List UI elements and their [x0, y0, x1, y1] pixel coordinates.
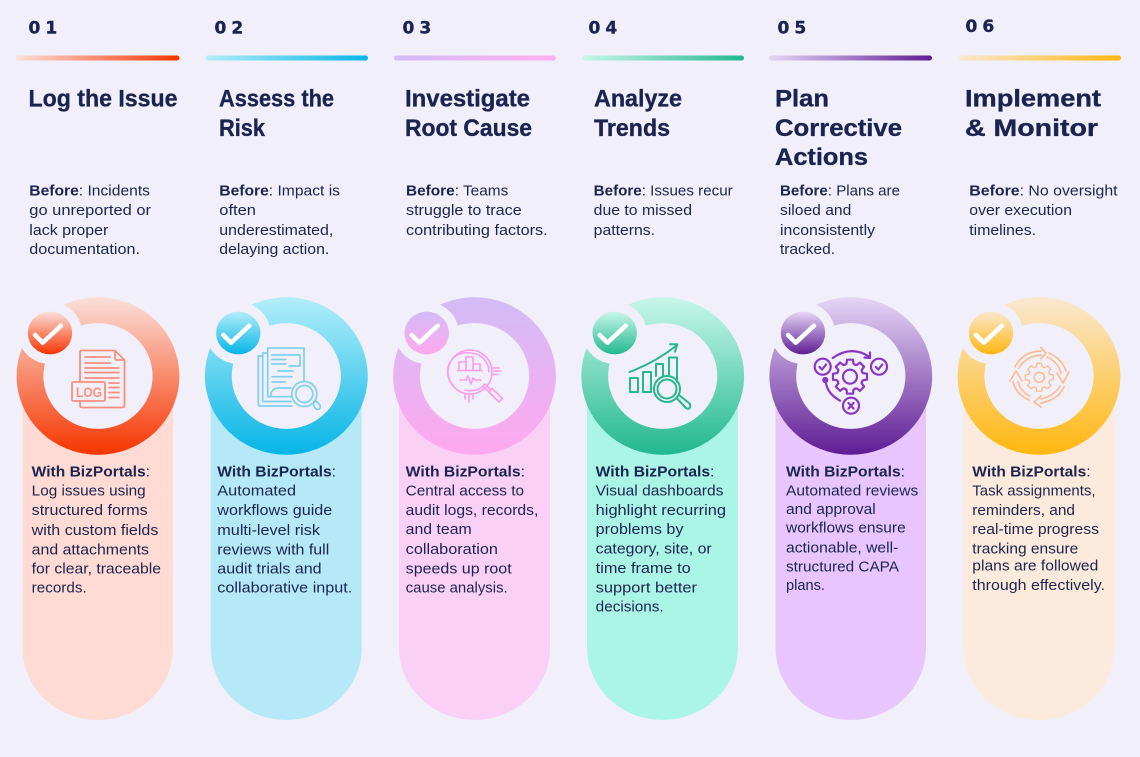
- with BizPortals text 3: cause analysis.: [406, 579, 508, 596]
- check badge 4: [583, 302, 647, 364]
- step number 03: 03: [402, 18, 436, 38]
- with BizPortals text 3: speeds up root: [406, 560, 513, 577]
- heading: Plan Corrective Actions: Actions: [775, 144, 868, 171]
- ring 2: [205, 297, 368, 455]
- with BizPortals text 1: Log issues using: [32, 483, 146, 500]
- with BizPortals text 5: With BizPortals :: [786, 464, 905, 481]
- with BizPortals text 3: Central access to: [406, 483, 524, 500]
- with BizPortals text 2: multi-level risk: [217, 522, 321, 539]
- progress bar 6: [959, 56, 1121, 60]
- before text 5: inconsistently: [780, 222, 876, 239]
- check badge 5: [771, 302, 835, 364]
- with BizPortals text 2: reviews with full: [217, 541, 329, 558]
- with BizPortals text 2: workflows guide: [216, 502, 332, 519]
- icon: gear with cycle arrows: [1010, 348, 1069, 407]
- before text 6: over execution: [969, 202, 1072, 219]
- ring 1: [17, 297, 179, 455]
- check badge 2: [206, 302, 270, 364]
- icon: gear with checks and cross: [815, 351, 887, 414]
- with BizPortals text 2: collaborative input.: [217, 579, 352, 596]
- with BizPortals text 6: tracking ensure: [972, 540, 1078, 557]
- column 4: Analyze Trends: [581, 18, 744, 720]
- before text 6: [969, 183, 1118, 239]
- heading: Investigate Root Cause: Root Cause: [405, 115, 532, 142]
- progress bar 5: [769, 56, 932, 60]
- with BizPortals text 2: [216, 464, 352, 596]
- with BizPortals text 3: collaboration: [406, 541, 498, 558]
- with BizPortals text 4: category, site, or: [596, 540, 712, 557]
- heading: Assess the Risk: Assess the: [219, 86, 334, 113]
- before text 1: [29, 183, 151, 258]
- heading: Investigate Root Cause: Investigate: [405, 86, 530, 113]
- before text 2: Before: Impact is: [219, 183, 340, 200]
- with BizPortals text 2: With BizPortals :: [217, 464, 336, 481]
- with BizPortals text 6: plans are followed: [972, 558, 1098, 575]
- with BizPortals text 1: With BizPortals :: [32, 464, 150, 481]
- pill panel 4: [587, 400, 738, 720]
- heading: Plan Corrective Actions: [775, 86, 902, 171]
- with BizPortals text 6: reminders, and: [972, 502, 1075, 519]
- with BizPortals text 5: workflows ensure: [785, 520, 906, 537]
- with BizPortals text 1: and attachments: [32, 541, 149, 558]
- before text 5: [780, 183, 900, 258]
- with BizPortals text 4: time frame to: [596, 560, 691, 577]
- with BizPortals text 5: actionable, well-: [786, 539, 898, 556]
- with BizPortals text 1: for clear, traceable: [32, 560, 161, 577]
- pill panel 2: [211, 400, 362, 720]
- heading: Analyze Trends: Trends: [594, 115, 670, 142]
- before text 2: often: [219, 202, 256, 219]
- with BizPortals text 1: [31, 464, 161, 596]
- with BizPortals text 5: structured CAPA: [786, 558, 899, 575]
- icon: log document: [72, 350, 124, 408]
- progress bar 1: [16, 56, 180, 60]
- progress bar 4: [582, 56, 744, 60]
- step number 02: 02: [214, 18, 248, 38]
- step number 06: 06: [966, 17, 999, 37]
- before text 4: due to missed: [594, 202, 692, 219]
- with BizPortals text 3: and team: [406, 521, 472, 538]
- with BizPortals text 4: support better: [596, 579, 697, 596]
- before text 1: Before: Incidents: [29, 183, 150, 200]
- with BizPortals text 6: With BizPortals :: [972, 464, 1091, 481]
- pill panel 6: [964, 400, 1115, 720]
- with BizPortals text 1: with custom fields: [31, 522, 158, 539]
- progress bar 2: [206, 56, 368, 60]
- with BizPortals text 2: audit trials and: [217, 560, 322, 577]
- icon: documents and magnifier: [258, 348, 320, 409]
- progress bar 3: [394, 56, 556, 60]
- before text 2: delaying action.: [219, 241, 329, 258]
- before text 5: Before: Plans are: [780, 183, 900, 200]
- pill panel 5: [776, 400, 926, 720]
- heading: Implement & Monitor: [965, 86, 1101, 142]
- before text 6: timelines.: [969, 222, 1036, 239]
- before text 4: [594, 183, 733, 239]
- with BizPortals text 6: through effectively.: [972, 577, 1105, 594]
- check badge 3: [395, 302, 459, 364]
- ring 5: [769, 297, 932, 455]
- heading: Implement & Monitor: Implement: [965, 86, 1101, 113]
- before text 1: documentation.: [29, 241, 140, 258]
- before text 3: [406, 183, 548, 239]
- heading: Implement & Monitor: & Monitor: [965, 115, 1098, 142]
- heading: Log the Issue: Log the Issue: [28, 86, 178, 113]
- with BizPortals text 6: Task assignments,: [972, 483, 1096, 500]
- with BizPortals text 3: audit logs, records,: [406, 502, 538, 519]
- heading: Assess the Risk: [219, 86, 334, 142]
- heading: Analyze Trends: Analyze: [594, 86, 682, 113]
- column 5: Plan Corrective Actions: [769, 18, 932, 720]
- with BizPortals text 3: [406, 464, 538, 596]
- check badge 1: [18, 302, 82, 364]
- before text 3: contributing factors.: [406, 222, 548, 239]
- with BizPortals text 4: problems by: [596, 521, 684, 538]
- before text 5: siloed and: [780, 202, 851, 219]
- column 6: Implement & Monitor: [958, 17, 1121, 720]
- icon: log document: LOG: [76, 384, 102, 400]
- before text 3: struggle to trace: [406, 202, 522, 219]
- before text 2: underestimated,: [219, 222, 333, 239]
- with BizPortals text 4: Visual dashboards: [596, 483, 723, 500]
- step number 01: 01: [28, 18, 62, 38]
- with BizPortals text 1: records.: [32, 579, 87, 596]
- with BizPortals text 5: Automated reviews: [786, 483, 918, 500]
- with BizPortals text 6: [972, 464, 1105, 594]
- pill panel 1: [22, 400, 173, 720]
- column 1: Log the Issue: [16, 18, 180, 720]
- step number 04: 04: [588, 18, 622, 38]
- with BizPortals text 4: highlight recurring: [596, 502, 726, 519]
- with BizPortals text 4: decisions.: [596, 599, 664, 616]
- with BizPortals text 1: structured forms: [32, 502, 148, 519]
- heading: Plan Corrective Actions: Corrective: [775, 115, 902, 142]
- with BizPortals text 2: Automated: [217, 483, 296, 500]
- with BizPortals text 5: and approval: [786, 501, 876, 518]
- before text 2: [219, 183, 340, 258]
- with BizPortals text 5: [785, 464, 918, 594]
- ring 3: [393, 297, 556, 455]
- icon: growth chart with magnifier: [630, 344, 690, 409]
- icon: magnifier analysing chart: [448, 350, 502, 402]
- before text 4: Before: Issues recur: [594, 183, 733, 200]
- before text 3: Before: Teams: [406, 183, 508, 200]
- with BizPortals text 5: plans.: [786, 577, 825, 594]
- with BizPortals text 3: With BizPortals :: [406, 464, 525, 481]
- before text 4: patterns.: [594, 222, 655, 239]
- ring 6: [958, 297, 1120, 455]
- ring 4: [581, 297, 744, 455]
- pill panel 3: [399, 400, 550, 720]
- before text 1: lack proper: [29, 222, 108, 239]
- check badge 6: [959, 302, 1023, 364]
- heading: Plan Corrective Actions: Plan: [775, 86, 829, 113]
- column 3: Investigate Root Cause: [393, 18, 556, 720]
- heading: Assess the Risk: Risk: [219, 115, 266, 142]
- step number 05: 05: [778, 18, 811, 38]
- before text 6: Before: No oversight: [969, 183, 1118, 200]
- before text 1: go unreported or: [29, 202, 151, 219]
- heading: Analyze Trends: [594, 86, 682, 142]
- with BizPortals text 4: With BizPortals :: [596, 464, 714, 481]
- heading: Investigate Root Cause: [405, 86, 532, 142]
- with BizPortals text 4: [596, 464, 726, 616]
- column 2: Assess the Risk: [205, 18, 368, 720]
- before text 5: tracked.: [780, 241, 835, 258]
- with BizPortals text 6: real-time progress: [972, 521, 1099, 538]
